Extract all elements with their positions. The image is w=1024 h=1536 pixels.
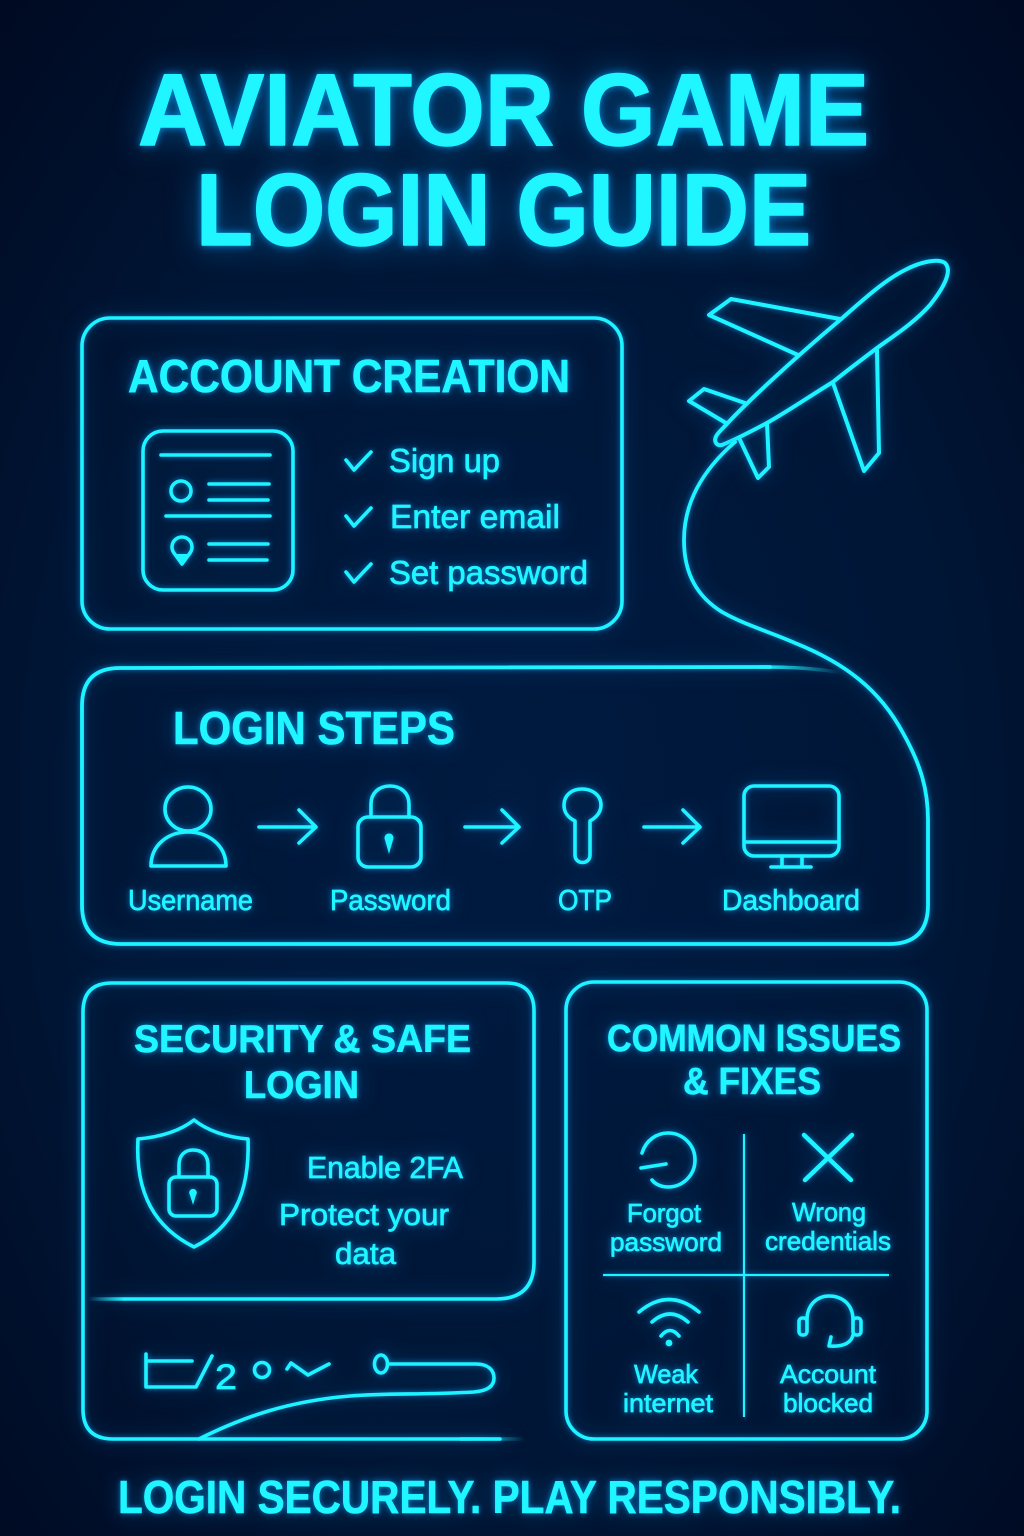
arrow	[259, 810, 316, 843]
issue labels: Forgot	[627, 1198, 702, 1228]
issue labels	[610, 1197, 891, 1418]
checklist: Sign up	[389, 442, 500, 479]
flight trail and panel: login steps	[82, 442, 928, 944]
panel content: login steps	[128, 702, 860, 917]
step labels: OTP	[558, 885, 612, 917]
heading: account creation: ACCOUNT CREATION	[128, 350, 570, 402]
grid dividers	[603, 1134, 889, 1417]
panel: common issues and fixes	[566, 982, 927, 1439]
heading: login steps: LOGIN STEPS	[173, 702, 455, 754]
issue labels: Weak	[634, 1359, 699, 1389]
title: LOGIN GUIDE	[196, 153, 811, 267]
icon: user	[151, 787, 226, 866]
heading: common issues: & FIXES	[683, 1061, 821, 1103]
icon: forgot password	[641, 1133, 695, 1187]
icon: profile form	[143, 431, 293, 590]
panel: account creation	[82, 318, 622, 629]
issue labels: password	[610, 1227, 722, 1257]
scribbled decoration	[146, 1354, 494, 1439]
security tips: Enable 2FA	[307, 1150, 463, 1185]
arrow	[644, 810, 700, 843]
footer tagline: LOGIN SECURELY. PLAY RESPONSIBLY.	[118, 1471, 901, 1523]
arrow	[465, 810, 519, 843]
icon: key	[564, 789, 601, 862]
airplane icon	[689, 261, 948, 478]
step labels: Password	[330, 885, 451, 917]
heading: security	[134, 1018, 471, 1107]
issue labels: credentials	[765, 1226, 891, 1256]
step labels	[128, 885, 860, 917]
panel: security and safe login	[83, 983, 534, 1439]
title: AVIATOR GAME	[138, 53, 869, 167]
issue labels: blocked	[783, 1388, 873, 1418]
icon: shield with padlock	[138, 1120, 248, 1247]
icon: monitor	[744, 786, 839, 867]
checklist	[346, 442, 588, 591]
checklist: Enter email	[390, 498, 560, 535]
icon: headset	[799, 1296, 861, 1346]
icon: padlock	[358, 786, 421, 867]
heading: security: LOGIN	[244, 1064, 359, 1107]
scribbled decoration: 2	[215, 1358, 237, 1397]
title	[138, 53, 869, 267]
issue labels: Wrong	[792, 1197, 866, 1227]
security tips	[279, 1150, 463, 1271]
checklist: Set password	[389, 554, 588, 591]
issue labels: internet	[623, 1388, 714, 1418]
step labels: Username	[128, 885, 253, 917]
issue labels: Account	[780, 1359, 877, 1389]
heading: security: SECURITY & SAFE	[134, 1018, 471, 1061]
icon: weak wifi	[639, 1300, 699, 1346]
heading: common issues	[607, 1018, 901, 1103]
security tips: Protect your	[279, 1197, 449, 1232]
icon: wrong credentials	[804, 1135, 852, 1180]
step labels: Dashboard	[722, 885, 860, 917]
heading: common issues: COMMON ISSUES	[607, 1018, 901, 1060]
security tips: data	[335, 1236, 397, 1271]
